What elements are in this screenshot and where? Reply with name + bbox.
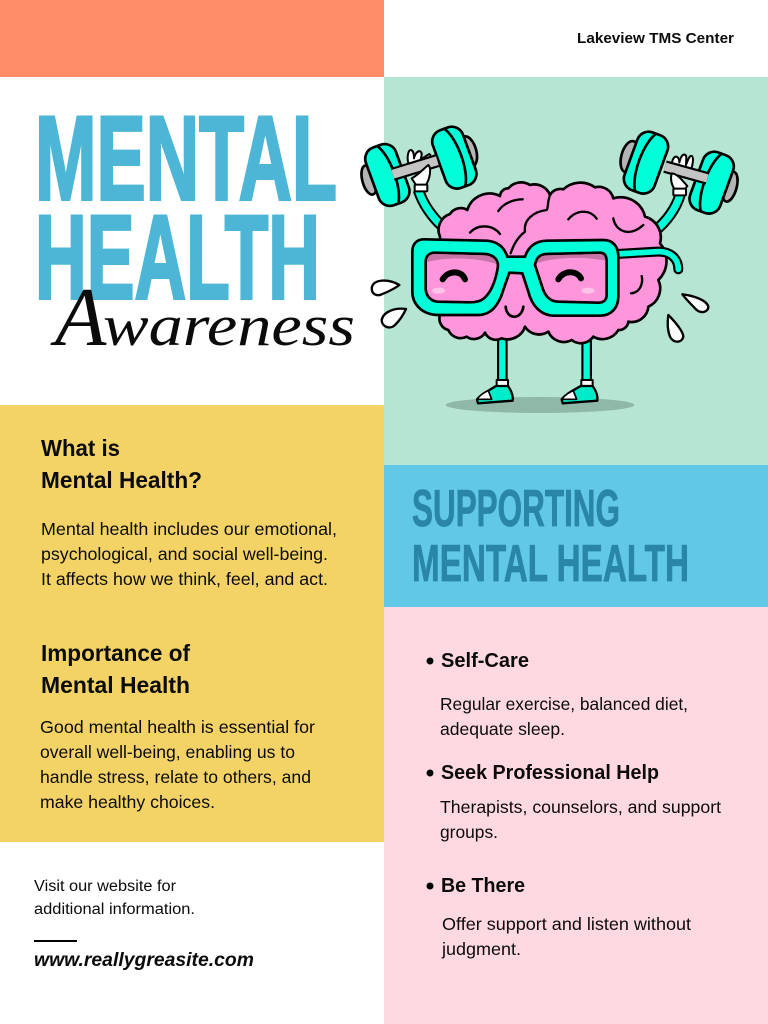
section: what is mental health: What is — [41, 435, 120, 461]
icon: left hand fingers — [408, 150, 430, 163]
icon: right hand thumb and cuff — [671, 173, 687, 195]
left lens shade — [427, 254, 497, 264]
icon: right dumbbell bar — [665, 167, 707, 178]
list item: self-care: Self-Care — [441, 649, 529, 672]
icon: left hand thumb and cuff — [412, 165, 430, 191]
right lens shade — [537, 254, 605, 263]
list item: self-care: Regular exercise, balanced diet, — [440, 694, 688, 714]
section: what is mental health: Mental Health? — [41, 467, 202, 493]
illustration: brain lifting dumbbells — [359, 123, 740, 413]
list item: be there: judgment. — [441, 939, 521, 959]
list item: seek professional help: Seek Professional Help — [441, 761, 659, 784]
title — [35, 92, 355, 364]
section: importance of mental health: overall well-being, enabling us to — [40, 742, 295, 762]
icon: arms — [418, 190, 680, 232]
list item: be there — [426, 874, 691, 959]
list item: seek professional help: groups. — [440, 822, 498, 842]
website call to action — [34, 878, 254, 971]
list item: seek professional help — [426, 761, 721, 842]
title: A — [50, 271, 107, 364]
section: what is mental health: It affects how we think, feel, and act. — [41, 569, 328, 589]
list item: be there: Offer support and listen without — [442, 914, 691, 934]
icon: brain body — [439, 182, 667, 343]
ground shadow — [446, 397, 634, 413]
section: importance of mental health — [40, 640, 315, 812]
left lens — [426, 253, 498, 302]
heading: supporting mental health: SUPPORTING — [412, 480, 620, 538]
panel: orange header block — [0, 0, 384, 77]
list item: seek professional help: Therapists, counselors, and support — [440, 797, 721, 817]
list item: self-care — [426, 649, 688, 739]
section: importance of mental health: Good mental health is essential for — [40, 717, 315, 737]
icon: right dumbbell — [617, 128, 740, 217]
section: importance of mental health: Importance of — [41, 640, 190, 666]
section: what is mental health: psychological, and social well-being. — [41, 544, 328, 564]
icon: legs and shoes — [477, 333, 597, 403]
website call to action: www.reallygreasite.com — [34, 949, 254, 971]
section: what is mental health: Mental health includes our emotional, — [41, 519, 337, 539]
title: MENTAL — [35, 92, 337, 226]
panel: blue supporting heading block — [384, 465, 768, 607]
icon: glasses — [412, 239, 678, 316]
website call to action: additional information. — [34, 901, 195, 918]
title: wareness — [103, 293, 355, 358]
organization name: Lakeview TMS Center — [577, 30, 734, 47]
glasses frame — [412, 239, 618, 316]
section: importance of mental health: handle stress, relate to others, and — [40, 767, 311, 787]
icon: right hand fingers — [672, 155, 693, 172]
section: what is mental health — [41, 435, 337, 589]
section: importance of mental health: Mental Health — [41, 672, 190, 698]
title: HEALTH — [35, 190, 320, 324]
panel: pink support list block — [384, 607, 768, 1024]
icon: left dumbbell bar — [393, 161, 437, 174]
glasses arm — [617, 252, 678, 269]
icon: face — [432, 272, 595, 317]
heading: supporting mental health — [412, 480, 689, 593]
list item: be there: Be There — [441, 874, 525, 897]
panel: green illustration background — [384, 77, 768, 465]
list item: self-care: adequate sleep. — [440, 719, 565, 739]
panel: yellow information block — [0, 405, 384, 842]
icon: left dumbbell — [359, 123, 480, 209]
website call to action: Visit our website for — [34, 878, 176, 895]
section: importance of mental health: make healthy choices. — [40, 792, 215, 812]
icon: sweat drops — [372, 281, 708, 342]
right lens — [535, 253, 607, 303]
